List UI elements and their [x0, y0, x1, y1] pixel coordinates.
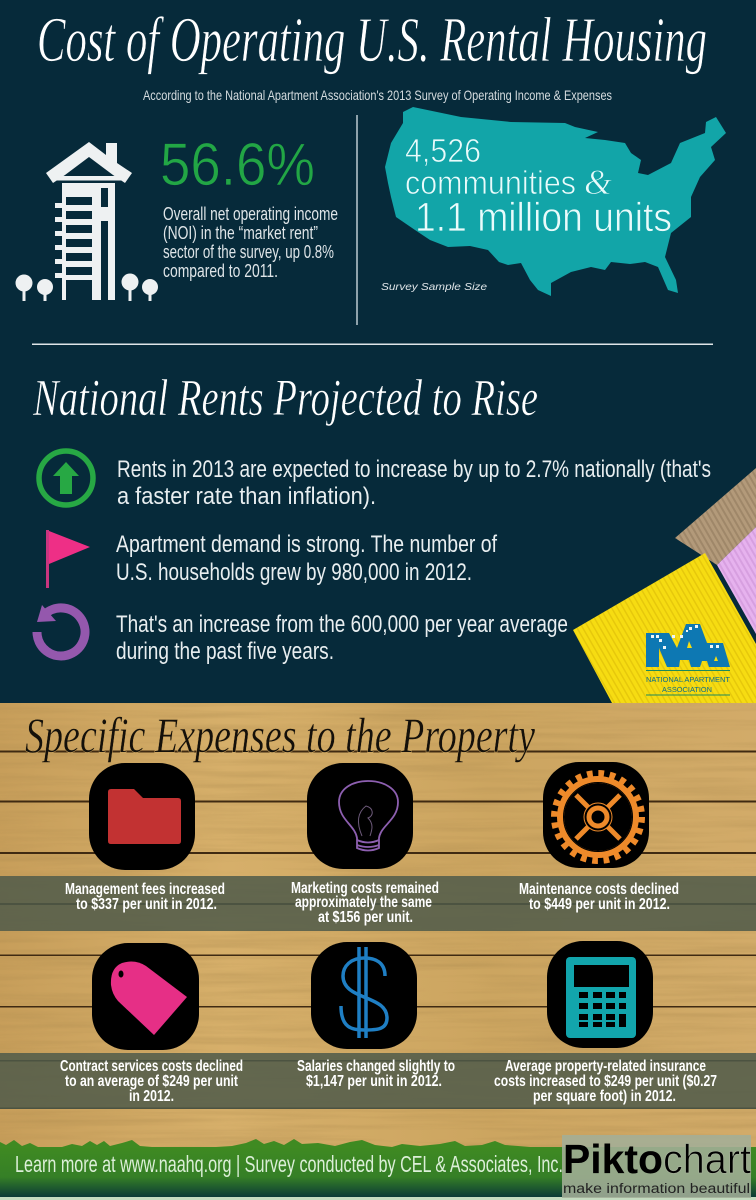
statistic: 56.6%: 56.6% — [160, 131, 315, 198]
icon: red folder — [89, 763, 195, 870]
caption: management fees: to $337 per unit in 2012. — [76, 896, 217, 913]
icon: orange gear — [543, 762, 649, 868]
text block: apartment demand: U.S. households grew by 980,000 in 2012. — [116, 559, 472, 586]
text block: net operating income — [163, 204, 338, 281]
icon: light bulb — [307, 763, 413, 869]
icon: dollar sign — [311, 942, 417, 1049]
caption: marketing costs: Marketing costs remained — [291, 880, 439, 897]
logo: National Apartment Association — [646, 624, 730, 696]
caption: salaries: Salaries changed slightly to — [297, 1058, 455, 1075]
caption: contract services — [60, 1058, 243, 1105]
map text: sample size figures: & — [584, 162, 612, 202]
caption: salaries: $1,147 per unit in 2012. — [306, 1073, 442, 1090]
text block: rents expected to increase: a faster rate than inflation). — [117, 483, 376, 510]
caption: maintenance costs: to $449 per unit in 2012. — [529, 896, 670, 913]
caption band row 2 — [0, 1053, 756, 1109]
icon: apartment building with trees — [16, 142, 158, 301]
text block: apartment demand — [116, 531, 497, 586]
caption: contract services: in 2012. — [129, 1088, 174, 1105]
text block: rents expected to increase — [117, 456, 711, 510]
text block: net operating income: compared to 2011. — [163, 261, 278, 281]
map text: sample size figures: 4,526 — [405, 132, 481, 169]
decorative paper sheets — [573, 468, 756, 703]
caption: contract services: Contract services costs declined — [60, 1058, 243, 1075]
text block: increase from average: during the past five years. — [116, 638, 334, 665]
caption: management fees: Management fees increased — [65, 881, 225, 898]
map text: sample size figures: communities — [405, 164, 576, 201]
subtitle: According to the National Apartment Association's 2013 Survey of Operating Income & Expenses — [143, 87, 612, 103]
caption band row 1 — [0, 876, 756, 931]
map text: sample size figures — [405, 132, 672, 240]
caption: marketing costs: approximately the same — [295, 894, 432, 911]
text block: net operating income: sector of the survey, up 0.8% — [163, 242, 334, 262]
caption: maintenance costs: Maintenance costs declined — [519, 881, 679, 898]
watermark: Piktochart — [562, 1135, 752, 1198]
caption: salaries — [297, 1058, 455, 1090]
text block: increase from average: That's an increase from the 600,000 per year average — [116, 611, 568, 638]
caption: maintenance costs — [519, 881, 679, 913]
icon: calculator — [547, 941, 653, 1048]
map: contiguous United States — [385, 107, 726, 296]
caption: marketing costs: at $156 per unit. — [318, 909, 413, 926]
watermark: Piktochart: make information beautiful — [563, 1181, 750, 1196]
text block: net operating income: (NOI) in the “market rent” — [163, 223, 318, 243]
watermark: Piktochart: Pikto — [563, 1136, 663, 1182]
text block: increase from average — [116, 611, 568, 665]
dark background — [0, 0, 756, 703]
text block: net operating income: Overall net operating income — [163, 204, 338, 224]
caption: survey sample size: Survey Sample Size — [381, 281, 487, 293]
logo: National Apartment Association: NATIONAL APARTMENT — [646, 675, 730, 684]
caption: insurance — [494, 1058, 717, 1105]
map text: sample size figures: 1.1 million units — [415, 194, 672, 240]
caption: insurance: per square foot) in 2012. — [533, 1088, 676, 1105]
wood background — [0, 703, 756, 1200]
grass strip — [0, 1139, 756, 1200]
logo: National Apartment Association: ASSOCIATION — [662, 685, 712, 694]
icon: pink price tag — [92, 943, 199, 1050]
watermark: Piktochart: chart — [663, 1136, 752, 1182]
heading: national rents: National Rents Projected to Rise — [32, 370, 538, 427]
text block: apartment demand: Apartment demand is strong. The number of — [116, 531, 497, 558]
icon: pink flag — [46, 530, 90, 588]
caption: contract services: to an average of $249 per unit — [65, 1073, 238, 1090]
icon: green up arrow — [39, 451, 93, 505]
heading: specific expenses: Specific Expenses to the Property — [25, 707, 536, 763]
icon: purple circular arrow — [37, 605, 85, 656]
caption: marketing costs — [291, 880, 439, 926]
caption: management fees — [65, 881, 225, 913]
